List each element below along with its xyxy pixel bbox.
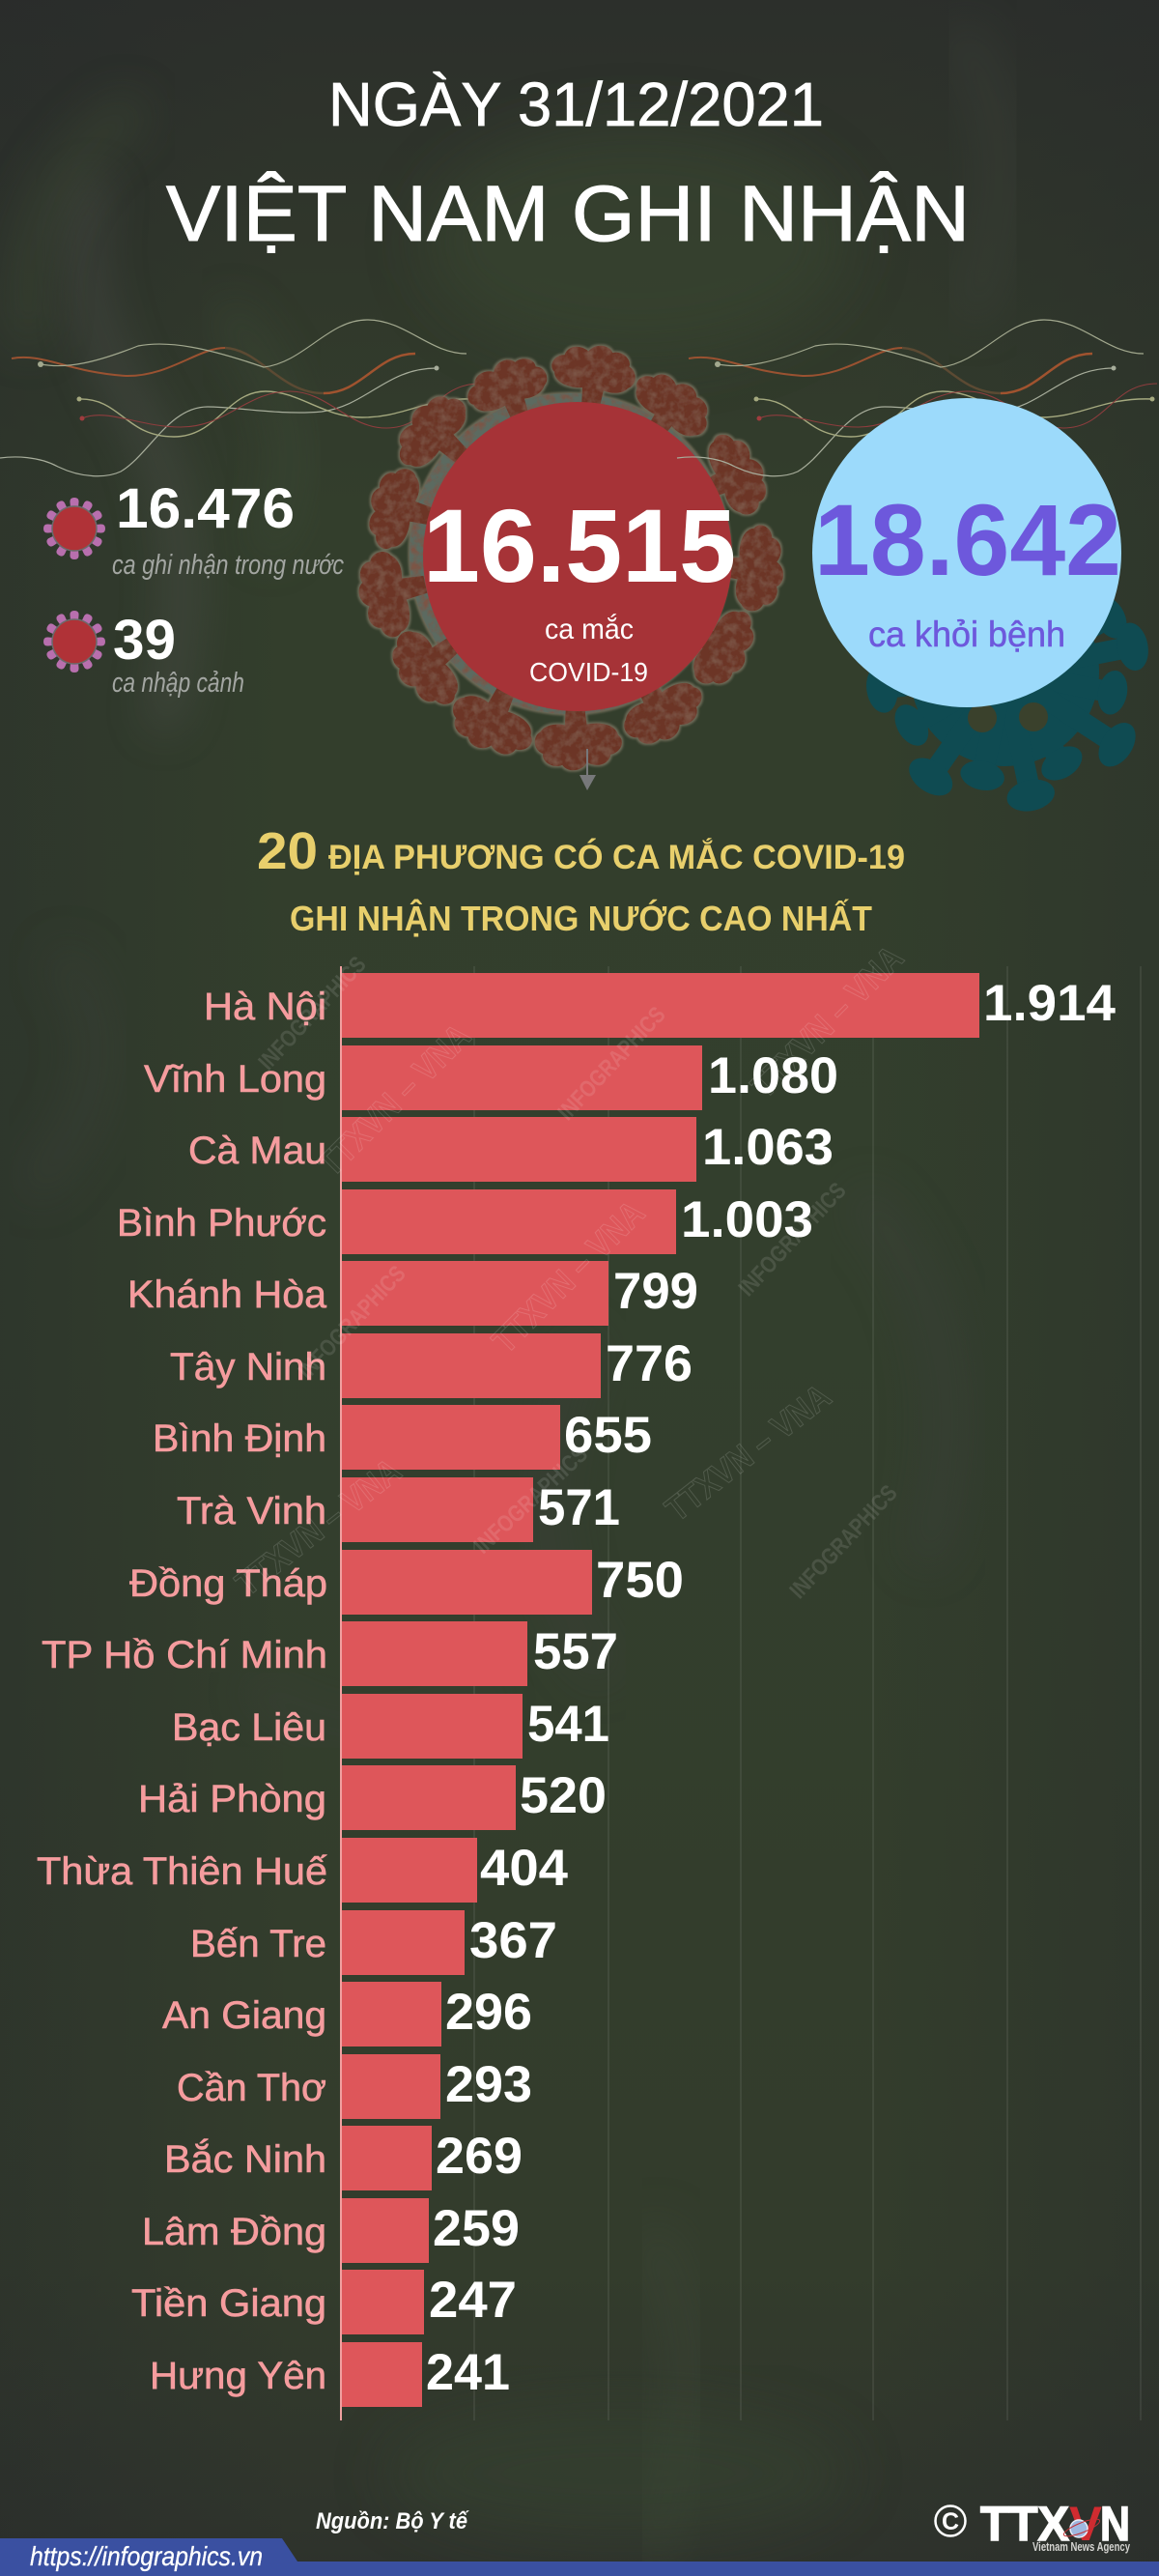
big coronavirus illustration [352,339,787,772]
row: Bạc Liêu [172,1694,609,1759]
logo TTXVN: V [1069,2497,1103,2551]
watermarks: INFOGRAPHICS [784,1480,903,1604]
watermarks: TTXVN – VNA [658,1376,838,1529]
row: Tiền Giang [131,2270,517,2334]
row: Thừa Thiên Huế: 404 [480,1840,569,1897]
source: Nguồn: Bộ Y tế [316,2508,469,2534]
row: Cần Thơ: 293 [445,2056,532,2113]
row: Đồng Tháp: 750 [596,1552,684,1609]
watermarks: INFOGRAPHICS [733,1178,852,1302]
row: Trà Vinh: 571 [538,1479,620,1536]
title: date: NGÀY 31/12/2021 [328,70,824,139]
row: Bình Phước [117,1189,813,1254]
row: Khánh Hòa: 799 [613,1263,698,1320]
icon: small virus domestic cases [43,498,105,559]
website url: https://infographics.vn [30,2541,263,2571]
row: Bắc Ninh: Bắc Ninh [164,2137,326,2181]
row: Bến Tre [190,1910,557,1975]
row: Bình Phước: Bình Phước [117,1202,326,1245]
row: Hà Nội [204,973,1117,1038]
logo TTXVN: N [1100,2497,1130,2551]
row: Cà Mau: 1.063 [702,1119,834,1176]
title: main: VIỆT NAM GHI NHẬN [166,170,970,258]
total cases caption line 1: ca mắc [545,614,634,645]
row: Bình Định: 655 [564,1407,652,1464]
row: Thừa Thiên Huế: Thừa Thiên Huế [37,1850,327,1893]
row: Bến Tre: 367 [469,1912,557,1969]
row: TP Hồ Chí Minh [42,1621,618,1686]
decorative waves left [0,320,480,476]
row: Thừa Thiên Huế [37,1838,569,1903]
row: Hải Phòng: 520 [520,1767,607,1824]
watermarks: INFOGRAPHICS [293,1261,411,1385]
total cases caption line 2: COVID-19 [529,657,648,687]
teal virus icon [863,577,1152,816]
watermarks: INFOGRAPHICS [253,952,372,1075]
heading line 2: GHI NHẬN TRONG NƯỚC CAO NHẤT [290,898,872,938]
arrow [580,749,596,790]
row: Hà Nội: Hà Nội [204,986,326,1028]
row: Bến Tre: Bến Tre [190,1923,326,1965]
row: Lâm Đồng: 259 [433,2200,520,2257]
watermarks: INFOGRAPHICS [552,1002,671,1126]
row: Trà Vinh [177,1477,620,1542]
decorative waves right [677,320,1157,476]
blue circle: recovered [812,398,1121,707]
row: Lâm Đồng: Lâm Đồng [142,2211,326,2253]
watermarks [228,937,911,1604]
bar chart [37,966,1141,2420]
row: Bình Định: Bình Định [153,1417,326,1460]
axis [340,966,342,2420]
row: Cần Thơ [177,2054,532,2119]
row: Tây Ninh: Tây Ninh [170,1346,326,1388]
row: Hải Phòng [138,1765,607,1830]
row: Hưng Yên: Hưng Yên [150,2355,326,2397]
watermarks: TTXVN – VNA [484,1192,652,1360]
row: Vĩnh Long: Vĩnh Long [144,1058,326,1101]
footer band [0,2538,1159,2576]
row: Khánh Hòa: Khánh Hòa [127,1274,327,1316]
row: Hà Nội: 1.914 [983,975,1117,1032]
heading line 1: ĐỊA PHƯƠNG CÓ CA MẮC COVID-19 [328,838,905,876]
stat: domestic caption: ca ghi nhận trong nước [112,550,344,581]
row: Tây Ninh: 776 [606,1335,693,1392]
logo TTXVN: TTX [980,2497,1069,2551]
stat: imported caption: ca nhập cảnh [112,668,244,699]
row: Bình Phước: 1.003 [681,1191,813,1248]
row: Hưng Yên [150,2342,510,2407]
row: An Giang: 296 [445,1984,532,2041]
row: Bắc Ninh: 269 [436,2128,523,2185]
row: Bình Định [153,1405,652,1470]
row: Bắc Ninh [164,2126,523,2190]
row: Lâm Đồng [142,2198,520,2263]
row: Bạc Liêu: 541 [527,1696,609,1753]
row: Cà Mau [188,1117,834,1182]
row: Hải Phòng: Hải Phòng [138,1778,326,1820]
icon: small virus imported cases [43,611,105,673]
row: Vĩnh Long: 1.080 [708,1047,838,1104]
row: Vĩnh Long [144,1045,838,1110]
row: Hưng Yên: 241 [426,2344,510,2401]
recovered number: 18.642 [814,484,1121,597]
recovered caption: ca khỏi bệnh [868,615,1065,654]
row: Cà Mau: Cà Mau [188,1130,326,1172]
row: An Giang [162,1982,532,2046]
row: Khánh Hòa [127,1261,698,1326]
row: Tây Ninh [170,1333,693,1398]
watermarks: TTXVN – VNA [743,937,911,1105]
row: Tiền Giang: Tiền Giang [131,2282,326,2325]
heading number 20: 20 [257,822,318,880]
row: Tiền Giang: 247 [429,2272,517,2329]
row: Đồng Tháp: Đồng Tháp [129,1562,327,1605]
row: Cần Thơ: Cần Thơ [177,2067,326,2109]
row: An Giang: An Giang [162,1994,326,2037]
logo TTXVN: C [942,2508,959,2535]
row: TP Hồ Chí Minh: TP Hồ Chí Minh [42,1634,327,1676]
stat: domestic number: 16.476 [116,477,295,540]
chart heading [257,822,905,938]
row: Bạc Liêu: Bạc Liêu [172,1706,326,1749]
watermarks: TTXVN – VNA [310,1016,478,1184]
logo TTXVN [935,2497,1131,2554]
stat: imported number: 39 [113,609,176,672]
red circle: total cases [423,402,736,711]
row: TP Hồ Chí Minh: 557 [533,1623,618,1680]
row: Đồng Tháp [129,1550,684,1615]
watermarks: INFOGRAPHICS [469,1441,593,1560]
row: Trà Vinh: Trà Vinh [177,1490,326,1532]
total cases number: 16.515 [423,487,736,604]
watermarks: TTXVN – VNA [228,1450,409,1603]
